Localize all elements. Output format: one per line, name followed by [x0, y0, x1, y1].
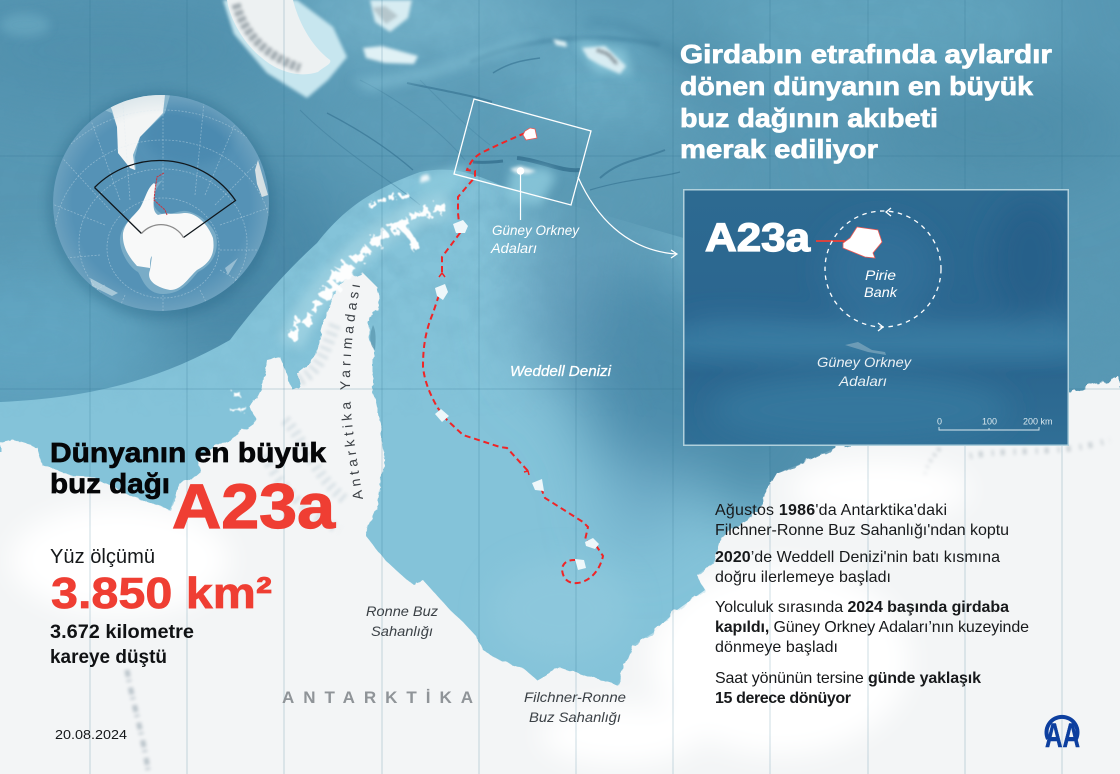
- label: Filchner-Ronne Ice Shelf: Buz Sahanlığı: [529, 709, 621, 725]
- final iceberg position: [523, 128, 537, 140]
- label: South Orkney Islands: Güney Orkney: [492, 222, 580, 238]
- scale bar: 200 km: [1023, 416, 1053, 426]
- paragraph 1986: Ağustos 1986'da Antarktika'daki: [715, 502, 947, 519]
- label: Ronne Ice Shelf: [366, 603, 438, 639]
- continental shelf and Weddell Sea: [0, 140, 840, 700]
- ocean tone patches: [0, 0, 1120, 410]
- bright ice patches: [10, 460, 970, 765]
- label: Antarctica: ANTARKTİKA: [282, 688, 473, 707]
- direction arrows: [439, 273, 529, 475]
- South America and islands: [223, 0, 626, 183]
- inset label: South Orkney: Güney Orkney: [817, 354, 912, 370]
- Antarctica land: [0, 273, 1120, 774]
- area statistic: kareye düştü: [50, 647, 167, 668]
- paragraph 2024: kapıldı, Güney Orkney Adaları’nın kuzeyinde: [715, 619, 1029, 636]
- scale bar: 0: [937, 416, 942, 426]
- scale bar: [937, 416, 1053, 430]
- South Orkney marker: [510, 166, 536, 220]
- callout: world's largest iceberg: [50, 437, 336, 542]
- headline: dönen dünyanın en büyük: [680, 71, 1034, 101]
- area statistic: Yüz ölçümü: [50, 546, 155, 568]
- globe continents: [90, 95, 268, 296]
- globe map-extent sector: [94, 161, 236, 238]
- globe iceberg track: [154, 173, 167, 215]
- peninsula shelf glow: [290, 205, 450, 345]
- paragraph 2024: [715, 599, 1029, 656]
- relief texture: [347, 206, 482, 271]
- inset label: South Orkney: [817, 354, 912, 389]
- headline: buz dağının akıbeti: [680, 103, 938, 133]
- paragraph rotation: Saat yönünün tersine günde yaklaşık: [715, 670, 981, 687]
- Anadolu Agency logo: AA: [1045, 717, 1080, 755]
- callout: world's largest iceberg: Dünyanın en büyük: [50, 437, 326, 468]
- headline: [680, 39, 1052, 164]
- area statistic: 3.850 km²: [51, 569, 272, 618]
- paragraph rotation: 15 derece dönüyor: [715, 690, 851, 707]
- globe locator: [46, 90, 274, 320]
- inset bathymetry: [707, 218, 1058, 434]
- Larsen embayment: [370, 325, 376, 350]
- paragraph 1986: [715, 502, 1009, 539]
- headline: merak ediliyor: [680, 134, 878, 164]
- inset iceberg: [843, 227, 882, 258]
- inset red leader: [816, 240, 845, 242]
- label: South Orkney Islands: [490, 222, 580, 256]
- label: Pirie Bank: Bank: [864, 284, 898, 300]
- label: South Orkney Islands: Adaları: [490, 240, 537, 256]
- globe graticule: [54, 104, 268, 311]
- rotation circle: [825, 208, 941, 331]
- inset iceberg name: A23a: [705, 216, 811, 260]
- paragraph 1986: Filchner-Ronne Buz Sahanlığı'ndan koptu: [715, 522, 1009, 539]
- paragraph 2020: doğru ilerlemeye başladı: [715, 569, 891, 586]
- label: Ronne Ice Shelf: Ronne Buz: [366, 603, 438, 619]
- Scotia shelf highlights: [0, 13, 632, 205]
- drifting iceberg markers: [435, 220, 599, 570]
- scale bar: 100: [982, 416, 997, 426]
- inset locator frame: [454, 99, 591, 205]
- paragraph 2024: Yolculuk sırasında 2024 başında girdaba: [715, 599, 1009, 616]
- label: Filchner-Ronne Ice Shelf: [524, 689, 626, 725]
- area statistic: [50, 546, 272, 668]
- label: Pirie Bank: Pirie: [865, 267, 896, 283]
- area statistic: 3.672 kilometre: [50, 622, 194, 643]
- label: Weddell Sea: Weddell Denizi: [510, 363, 612, 380]
- route line: [423, 133, 603, 583]
- A23a drift route: [423, 128, 603, 583]
- timeline text block: [715, 502, 1029, 707]
- leader arrow to inset: [578, 177, 677, 258]
- label: Ronne Ice Shelf: Sahanlığı: [371, 623, 433, 639]
- ice texture: [127, 325, 1110, 770]
- label: Filchner-Ronne Ice Shelf: Filchner-Ronne: [524, 689, 626, 705]
- big iceberg name: A23a: [172, 472, 336, 542]
- paragraph 2020: [715, 549, 1000, 586]
- inset panel: [684, 190, 1070, 445]
- inset label: South Orkney: Adaları: [838, 373, 887, 389]
- headline: Girdabın etrafında aylardır: [680, 39, 1052, 69]
- label: Antarctic Peninsula: Antarktika Yarımadası: [340, 284, 363, 499]
- ridges and trenches: [300, 23, 700, 205]
- paragraph rotation: [715, 670, 981, 707]
- label: Pirie Bank: [864, 267, 898, 300]
- paragraph 2024: dönmeye başladı: [715, 639, 838, 656]
- callout: world's largest iceberg: buz dağı: [50, 468, 170, 499]
- paragraph 2020: 2020’de Weddell Denizi'nin batı kısmına: [715, 549, 1000, 566]
- date: 20.08.2024: [55, 727, 127, 742]
- Antarctic Peninsula ridge: [232, 194, 445, 412]
